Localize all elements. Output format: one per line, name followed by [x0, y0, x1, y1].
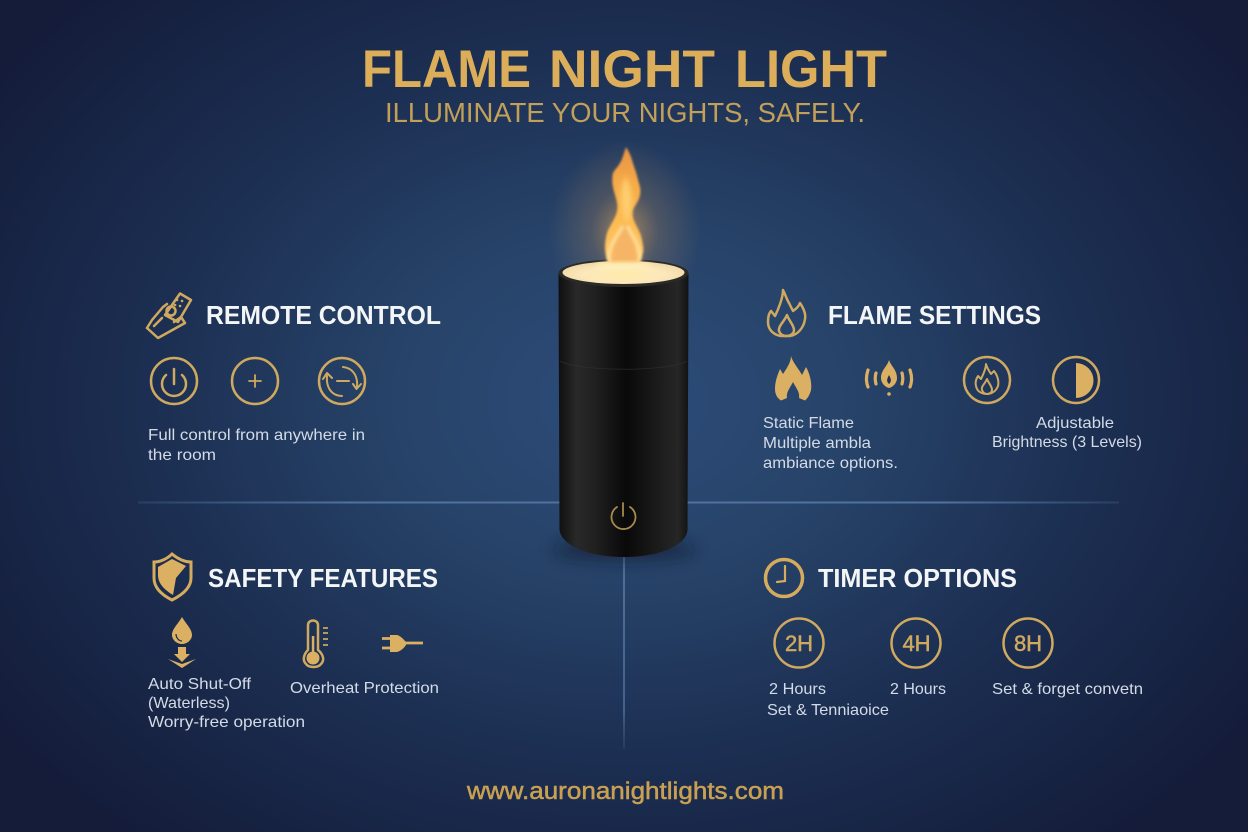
- icon: clock: [766, 560, 802, 596]
- static flame text: Static Flame: [763, 415, 854, 432]
- static flame text: [763, 415, 898, 472]
- product: flame lamp: [549, 140, 701, 561]
- second hours text: 2 Hours: [890, 681, 946, 698]
- inner flame: [612, 222, 636, 263]
- brightness text: Brightness (3 Levels): [992, 434, 1142, 451]
- heading: SAFETY FEATURES: [208, 565, 438, 593]
- lamp seam: [560, 361, 687, 369]
- flame glow: [549, 140, 701, 324]
- icon: static flame: [775, 356, 811, 400]
- icon: plug: [382, 635, 423, 652]
- heading: REMOTE CONTROL: [206, 302, 441, 330]
- title: FLAME: [362, 40, 531, 99]
- lamp top surface: [562, 261, 684, 284]
- badge: 2H: 2H: [785, 631, 813, 656]
- description: the room: [148, 447, 216, 464]
- panel: safety features: [148, 554, 439, 731]
- icon: flame in circle: [964, 357, 1010, 403]
- website url: www.auronanightlights.com: [466, 778, 784, 805]
- heading: TIMER OPTIONS: [818, 565, 1017, 593]
- flame core: [621, 176, 631, 224]
- subtitle: ILLUMINATE YOUR NIGHTS, SAFELY.: [385, 97, 865, 128]
- icon: flame waves: [866, 360, 912, 396]
- 2 hours text: Set & Tenniaoice: [767, 702, 889, 719]
- lamp shadow: [552, 539, 696, 561]
- auto shut-off text: Worry-free operation: [148, 714, 305, 731]
- brightness text: Adjustable: [1036, 415, 1114, 432]
- panel: flame settings: [763, 290, 1142, 472]
- icon: plus: [232, 358, 278, 404]
- description: [148, 427, 365, 464]
- lamp rim: [558, 259, 688, 287]
- 2 hours text: 2 Hours: [769, 681, 826, 698]
- icon: power: [151, 358, 197, 404]
- auto shut-off text: [148, 676, 305, 731]
- panel: timer options: [766, 560, 1143, 719]
- heading: FLAME SETTINGS: [828, 302, 1041, 330]
- icon: flame outline: [768, 290, 805, 336]
- description: Full control from anywhere in: [148, 427, 365, 444]
- icon: water drop with arrow: [168, 617, 196, 668]
- auto shut-off text: Auto Shut-Off: [148, 676, 252, 693]
- icon: hand holding remote: [147, 294, 191, 338]
- badge: 8H: [1004, 618, 1052, 668]
- lamp body: [558, 274, 688, 557]
- 2 hours text: [767, 681, 889, 719]
- icon: shield: [154, 554, 191, 600]
- badge: 8H: 8H: [1014, 631, 1042, 656]
- flame base light: [596, 262, 652, 270]
- title: LIGHT: [735, 40, 887, 99]
- overheat text: Overheat Protection: [290, 680, 439, 697]
- lamp power icon: [612, 503, 636, 529]
- icon: thermometer: [304, 620, 328, 667]
- auto shut-off text: (Waterless): [148, 695, 230, 712]
- title: [362, 40, 887, 99]
- icon: cycle minus: [319, 358, 365, 404]
- static flame text: Multiple ambla: [763, 435, 871, 452]
- outer flame: [605, 147, 643, 263]
- icon: brightness half circle: [1053, 357, 1099, 403]
- flame highlights: [609, 226, 640, 261]
- title: NIGHT: [549, 40, 715, 99]
- static flame text: ambiance options.: [763, 455, 898, 472]
- badge: 2H: [774, 618, 824, 668]
- brightness text: [992, 415, 1142, 451]
- badge: 4H: 4H: [902, 631, 931, 656]
- badge: 4H: [892, 618, 940, 668]
- panel: remote control: [147, 294, 441, 464]
- flame: [605, 147, 643, 263]
- set and forget text: Set & forget convetn: [992, 681, 1143, 698]
